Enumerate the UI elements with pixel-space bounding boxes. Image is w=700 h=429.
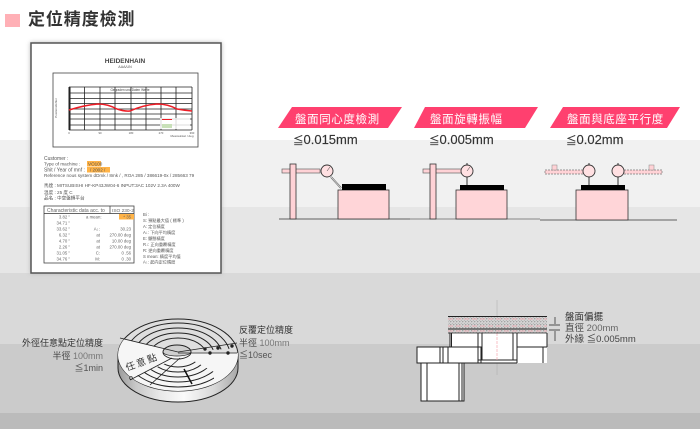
customer information: Shit / Year of mnf : <box>44 168 85 174</box>
right disk callout: 反覆定位精度 <box>239 324 293 335</box>
table legend: A: 定位精度 <box>143 223 166 230</box>
characteristic data table: * 35 <box>123 214 132 220</box>
ring grooves lower <box>137 362 214 388</box>
panel: platter concentricity <box>278 107 410 219</box>
characteristic data table: 0 .56 <box>121 250 132 256</box>
platter runout callout: 盤面偏擺 <box>565 311 604 323</box>
gauge diagram <box>410 163 540 219</box>
banner text: 盤面旋轉振幅 <box>430 112 503 126</box>
center hole <box>163 345 191 359</box>
tolerance value: ≦0.005mm <box>429 132 494 147</box>
line chart: Messwinkel / deg <box>170 134 194 138</box>
table legend: S: 預點最大值 ( 標準 ) <box>143 217 184 224</box>
right disk callout <box>239 324 293 360</box>
characteristic data table: A↓: <box>94 226 100 232</box>
table legend: Bi : <box>143 212 149 217</box>
banner <box>278 107 402 128</box>
characteristic data table: at <box>96 244 101 250</box>
title <box>5 9 135 29</box>
characteristic data table: 4.70 " <box>59 238 70 244</box>
characteristic data table: at <box>96 232 101 238</box>
line chart: 90 <box>98 131 102 135</box>
table legend: S mean: 精度平均值 <box>143 253 181 260</box>
panel: platter to base parallelism <box>540 107 680 220</box>
report model: AAA/UN <box>118 65 132 69</box>
report page <box>31 43 221 273</box>
platter <box>448 316 547 333</box>
panel: measurement report <box>31 43 221 273</box>
measuring rays <box>120 338 237 385</box>
characteristic data table: 270.00 deg <box>109 232 132 238</box>
ring grooves upper <box>131 322 230 350</box>
characteristic data table: 0 .30 <box>121 256 132 262</box>
characteristic data table: 31.05 " <box>57 250 70 256</box>
icon: title square <box>5 14 20 27</box>
characteristic data table: 6.32 " <box>59 232 70 238</box>
line chart: 180 <box>129 131 134 135</box>
runout marks <box>549 317 560 341</box>
table legend: R: 逆向重覆精度 <box>143 247 174 254</box>
line chart: 360 <box>190 131 195 135</box>
table legend: R↓: 正向重覆精度 <box>143 241 176 248</box>
left disk callout: ≦1min <box>74 362 103 373</box>
table legend: A↓: 起向定位精度 <box>143 258 176 266</box>
line chart: Gegraden und Daten Werte <box>110 88 150 92</box>
left disk callout <box>22 337 103 373</box>
line chart: Positionsfehler <box>54 98 58 118</box>
characteristic data table: at <box>96 238 101 244</box>
background bands <box>0 140 700 429</box>
rotor body <box>450 333 547 363</box>
banner <box>414 107 538 128</box>
characteristic data table: 3.82 " <box>59 214 70 220</box>
platter runout callout: 直徑 200mm <box>565 322 618 334</box>
characteristic data table: Characteristic data acc. to <box>47 208 105 214</box>
customer information: VO100 <box>88 162 103 166</box>
platter runout callout <box>565 311 636 345</box>
panel: platter rotation runout <box>410 107 540 219</box>
customer information: 品名 : 中空盤轉平台 <box>44 194 85 202</box>
disk top face <box>118 319 238 391</box>
hole inner lower <box>163 352 191 359</box>
characteristic data table: 33.62 " <box>57 226 70 232</box>
title text: 定位精度檢測 <box>28 9 135 29</box>
table legend <box>143 212 184 266</box>
characteristic data table <box>44 206 134 263</box>
table legend: A↓: 下向平均精度 <box>143 229 176 236</box>
gauge diagram <box>279 164 410 219</box>
characteristic data table: 34.76 " <box>57 256 70 262</box>
characteristic data table: M: <box>95 256 100 262</box>
characteristic data table: C: <box>96 250 100 256</box>
radial index mark <box>184 369 192 384</box>
customer information: Reference nous system dDmk / 8mk / , ROA 285 / 386619-0x / 285663 79 <box>44 173 195 178</box>
characteristic data table: ISO 230-2 <box>112 208 134 214</box>
gauge diagram <box>540 163 677 220</box>
disk side <box>118 355 238 402</box>
customer information: / 2002 / <box>90 168 106 172</box>
platter cross-section diagram <box>417 300 560 401</box>
characteristic data table: 30.23 <box>120 226 132 232</box>
characteristic data table: 34.71 " <box>57 220 70 226</box>
right disk callout: ≦10sec <box>239 349 273 360</box>
lower housing <box>421 363 464 401</box>
pink centre line <box>496 333 498 360</box>
sector label: 任意點 <box>124 351 160 374</box>
customer information: 馬達 : MITSUBISHI HF-KP43JW04-6 INPUT:3AC 102V 2.3A 400W <box>44 182 180 189</box>
platter runout callout: 外緣 ≦0.005mm <box>565 333 636 345</box>
characteristic data table: 10.00 deg <box>112 238 132 244</box>
characteristic data table: 2.26 " <box>59 244 70 250</box>
customer information: Customer : <box>44 156 68 162</box>
characteristic data table: a mean: <box>86 214 102 220</box>
rotor walls <box>450 333 547 363</box>
flange <box>417 347 481 363</box>
line chart: 0 <box>68 131 70 135</box>
customer information: 溫度 : 25 度 C <box>44 189 73 196</box>
tolerance value: ≦0.02mm <box>566 132 623 147</box>
right disk callout: 半徑 100mm <box>239 337 290 348</box>
left disk callout: 外徑任意點定位精度 <box>22 337 103 348</box>
table legend: E: 顯懸精度 <box>143 235 166 242</box>
disk diagram <box>118 318 238 402</box>
banner text: 盤面同心度檢測 <box>295 112 380 126</box>
report brand: HEIDENHAIN <box>105 58 146 65</box>
characteristic data table: 270.00 deg <box>109 244 132 250</box>
banner text: 盤面與底座平行度 <box>567 112 664 126</box>
line chart <box>53 73 198 147</box>
left disk callout: 半徑 100mm <box>52 350 103 361</box>
white sector <box>118 339 238 391</box>
customer information: Type of machine : <box>44 162 80 166</box>
customer information <box>44 156 195 202</box>
line chart: 270 <box>159 131 164 135</box>
banner <box>550 107 680 128</box>
tolerance value: ≦0.015mm <box>293 132 358 147</box>
